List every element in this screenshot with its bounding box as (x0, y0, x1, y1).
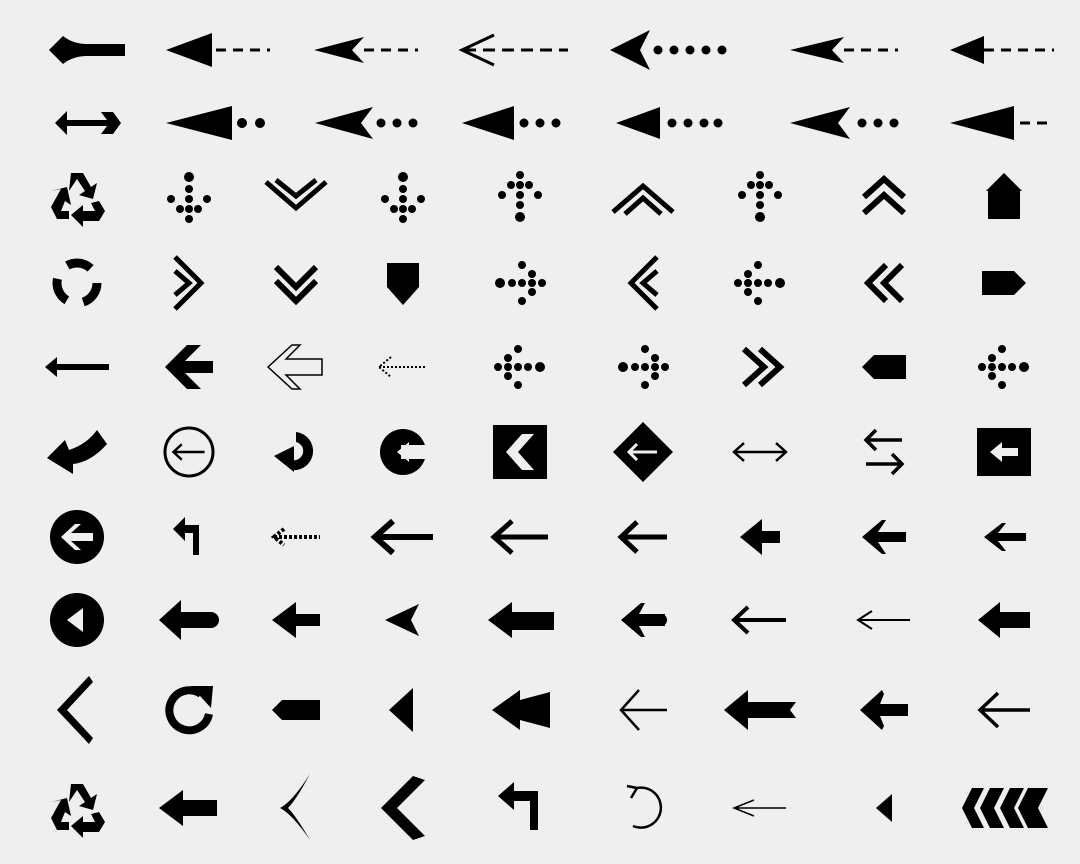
icon: bold arrow (860, 690, 908, 730)
icon: notched arrow (492, 690, 550, 730)
icon: bold arrow (272, 602, 320, 638)
row 1: arrows with dashed tails (49, 30, 1054, 70)
icon: triangle dot arrow (616, 107, 722, 139)
icon: small arrow (984, 523, 1026, 551)
icon: rounded bar (272, 700, 320, 720)
icon: dotted down arrow (381, 172, 425, 223)
icon: double up chevron narrow (864, 179, 904, 213)
icon: bold arrow (159, 790, 217, 826)
icon: dotted big arrow (494, 345, 545, 389)
icon: swap arrows (866, 430, 902, 474)
icon: rotate arrows (57, 263, 97, 303)
icon: hairline arrow (734, 800, 786, 816)
row 5 (45, 345, 1029, 389)
icon: bold block arrow (740, 519, 780, 555)
icon: circle outline arrow (165, 428, 213, 476)
icon: recycle (51, 784, 105, 838)
icon: rounded arrow (159, 600, 219, 640)
icon: triple chevron (962, 788, 1048, 828)
icon: thin arrow (980, 693, 1030, 727)
icon: triangle dashed arrow (166, 33, 270, 67)
icon: circular refresh (169, 686, 213, 730)
icon: double up chevron (613, 186, 673, 214)
icon: triangle dashed arrow (950, 106, 1052, 140)
icon: tiny triangle (876, 794, 892, 822)
icon: C arrow (380, 429, 427, 475)
icon: hairline arrow (858, 611, 910, 629)
icon: dotted down arrow (167, 172, 211, 223)
icon: barbed dashed arrow (314, 37, 418, 63)
icon: barbed dot arrow (315, 107, 418, 139)
icon: open chevron dashed arrow (462, 35, 568, 65)
icon: curved turn arrow (47, 430, 107, 474)
icon: thin bar arrow (45, 357, 109, 377)
icon: bold thin arrow (621, 522, 667, 552)
icon: thin arrow (734, 607, 786, 633)
icon: thick chevron (381, 776, 425, 840)
icon: dotted up arrow (738, 171, 782, 222)
icon: swoosh chevron (280, 774, 310, 840)
icon: turn left arrow (173, 517, 199, 555)
icon: double left chevron (868, 265, 902, 301)
icon: open circle arrow (627, 786, 661, 828)
icon: double right chevron (744, 349, 780, 385)
icon: bold short arrow (621, 603, 667, 637)
icon: pixel arrow (274, 529, 320, 545)
icon: square chevron (493, 425, 547, 479)
row 4 (57, 257, 1026, 309)
icon: u-turn arrow (274, 432, 313, 472)
icon: triangle dot arrow (462, 106, 560, 140)
row 7 (50, 510, 1026, 564)
icon: bold arrow (862, 520, 906, 554)
icon: double left chevron (631, 257, 657, 309)
icon: circle arrow (50, 510, 104, 564)
icon: barbed dashed arrow (790, 37, 898, 63)
icon: dotted up arrow (498, 171, 542, 222)
icon: bold thin arrow (375, 521, 433, 553)
icon: double down chevron (276, 267, 316, 301)
icon: open thin arrow (621, 690, 667, 730)
icon: bold thin arrow (494, 521, 548, 553)
icon: turn up-left arrow (498, 782, 538, 830)
icon: curved bar arrow (49, 36, 125, 64)
icon: bold chevron arrow (165, 345, 213, 389)
icon: double right chevron (175, 257, 201, 309)
icon: square arrow (977, 428, 1031, 476)
icon: dotted left house (862, 355, 906, 379)
row 8 (50, 593, 1030, 647)
icon: barbed dot arrow (790, 107, 898, 139)
icon: wide block arrow (488, 602, 554, 638)
icon: triangle dot arrow (166, 106, 265, 140)
icon: dotted down shield (387, 263, 419, 305)
icon: small triangle (389, 688, 413, 732)
icon: circle play-left (50, 593, 104, 647)
icon: dotted plus arrow (734, 261, 785, 305)
icon: double-headed arrow (734, 443, 786, 461)
icon: recycle (51, 173, 105, 227)
icon: big chevron (57, 676, 93, 744)
icon: outline arrow (268, 345, 322, 389)
row 3 (51, 171, 1022, 227)
icon: triangle dashed arrow (950, 36, 1054, 64)
row 9 (57, 676, 1030, 744)
icon: fletched arrow (55, 111, 121, 135)
icon: bold arrow (978, 602, 1030, 638)
icon: flag arrow (724, 690, 796, 730)
icon: dotted thin arrow (379, 357, 427, 377)
icon: dotted right house (982, 271, 1026, 295)
row 6 (47, 422, 1031, 482)
icon: double down chevron (266, 180, 326, 208)
icon: dotted right arrow (618, 345, 669, 389)
row 10 (51, 774, 1048, 840)
icon: diamond dot arrow (978, 345, 1029, 389)
icon: dotted arrow (610, 30, 726, 70)
row 2: arrows with dotted tails (55, 106, 1052, 140)
icon: diamond arrow (613, 422, 673, 482)
icon: dotted right arrow (495, 261, 546, 305)
icon: dotted house arrow (986, 173, 1022, 219)
icon: small chevron (385, 604, 419, 636)
